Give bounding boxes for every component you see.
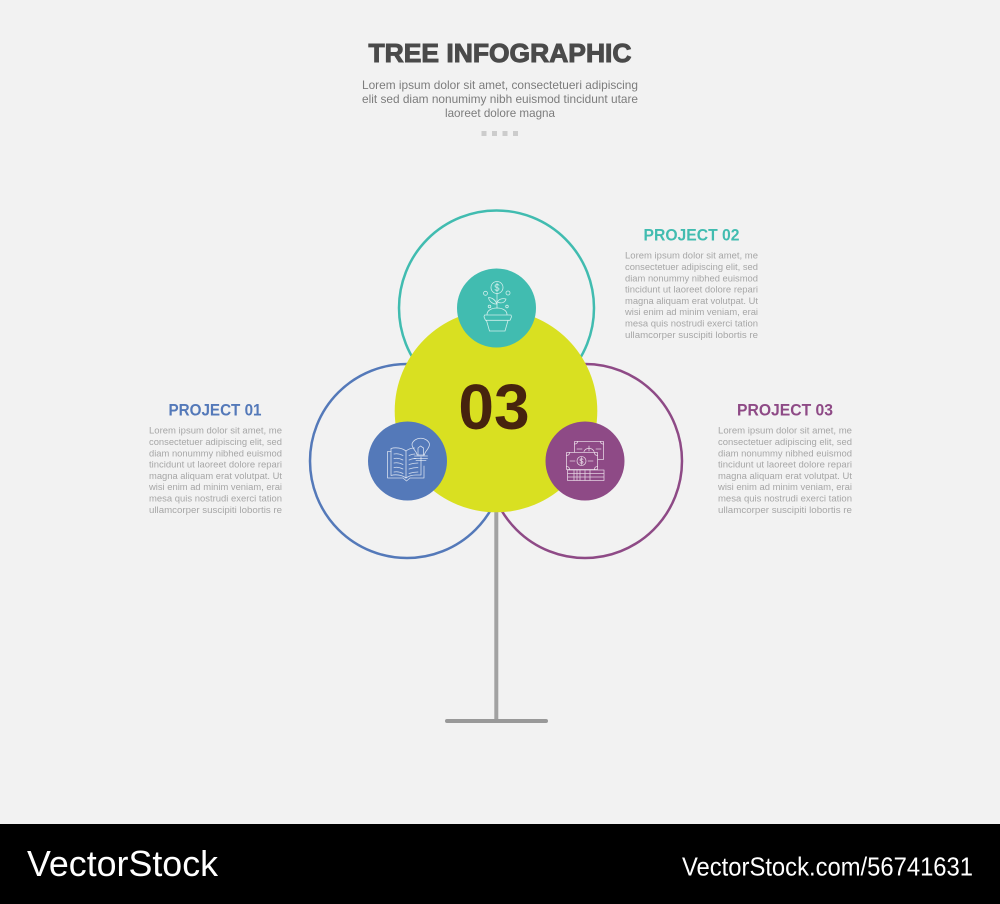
title: TREE INFOGRAPHIC: [368, 38, 632, 68]
subtitle text block: Lorem ipsum dolor sit amet, consectetueri adipiscing: [362, 78, 638, 92]
text block: project 02: magna aliquam erat volutpat. Ut: [625, 296, 758, 307]
text block: project 01: Lorem ipsum dolor sit amet, me: [149, 426, 282, 436]
outline circle: project 02: [399, 210, 594, 406]
subtitle text block: laoreet dolore magna: [445, 106, 555, 120]
text block: project 02: wisi enim ad minim veniam, erai: [624, 307, 758, 318]
text block: project 03: [717, 402, 852, 516]
text block: project 03: Lorem ipsum dolor sit amet, me: [718, 426, 852, 436]
text block: project 03: tincidunt ut laoreet dolore repari: [718, 460, 852, 471]
text block: project 01: ullamcorper suscipiti lobortis re: [149, 505, 282, 516]
text block: project 01: [148, 402, 282, 516]
footer watermark bar: VectorStock.com/56741631: [682, 852, 973, 882]
outline circle: project 01: [310, 364, 504, 558]
text block: project 03: magna aliquam erat volutpat. Ut: [718, 471, 852, 482]
central tree crown circle: [395, 310, 597, 512]
footer watermark bar: [0, 824, 1000, 904]
text block: project 03: consectetuer adipiscing elit, sed: [718, 437, 852, 448]
outline circle: project 03: [488, 364, 682, 558]
text block: project 01: tincidunt ut laoreet dolore repari: [149, 460, 282, 471]
icon: plant with coin on teal circle: [457, 268, 536, 348]
text block: project 02: Lorem ipsum dolor sit amet, me: [625, 250, 758, 262]
text block: project 03: wisi enim ad minim veniam, erai: [717, 482, 852, 493]
central number: 03: [458, 371, 530, 443]
text block: project 03: mesa quis nostrudi exerci tation: [718, 494, 852, 504]
text block: project 01: diam nonummy nibhed euismod: [149, 448, 282, 459]
text block: project 03: ullamcorper suscipiti lobortis re: [718, 505, 852, 516]
text block: project 01: PROJECT 01: [168, 402, 262, 420]
subtitle text block: [362, 78, 638, 120]
text block: project 01: wisi enim ad minim veniam, erai: [148, 482, 282, 493]
text block: project 02: ullamcorper suscipiti lobortis re: [625, 330, 758, 341]
text block: project 02: tincidunt ut laoreet dolore repari: [625, 285, 758, 296]
pagination dots: [482, 131, 518, 136]
footer watermark bar: VectorStock: [27, 843, 219, 884]
tree trunk and base: [445, 505, 548, 723]
text block: project 03: diam nonummy nibhed euismod: [718, 448, 852, 459]
text block: project 01: mesa quis nostrudi exerci tation: [149, 494, 282, 504]
text block: project 02: consectetuer adipiscing elit, sed: [625, 262, 758, 273]
text block: project 02: mesa quis nostrudi exerci tation: [625, 318, 758, 330]
text block: project 03: PROJECT 03: [737, 402, 833, 420]
icon: open book with light bulb on blue circle: [368, 422, 447, 500]
text block: project 01: magna aliquam erat volutpat. Ut: [149, 471, 282, 482]
text block: project 02: [624, 226, 758, 341]
icon: banknotes and coin stack on purple circle: [546, 422, 624, 500]
text block: project 02: diam nonummy nibhed euismod: [625, 273, 758, 284]
subtitle text block: elit sed diam nonumimy nibh euismod tincidunt utare: [362, 92, 638, 106]
text block: project 02: PROJECT 02: [644, 226, 740, 244]
text block: project 01: consectetuer adipiscing elit, sed: [149, 437, 282, 448]
